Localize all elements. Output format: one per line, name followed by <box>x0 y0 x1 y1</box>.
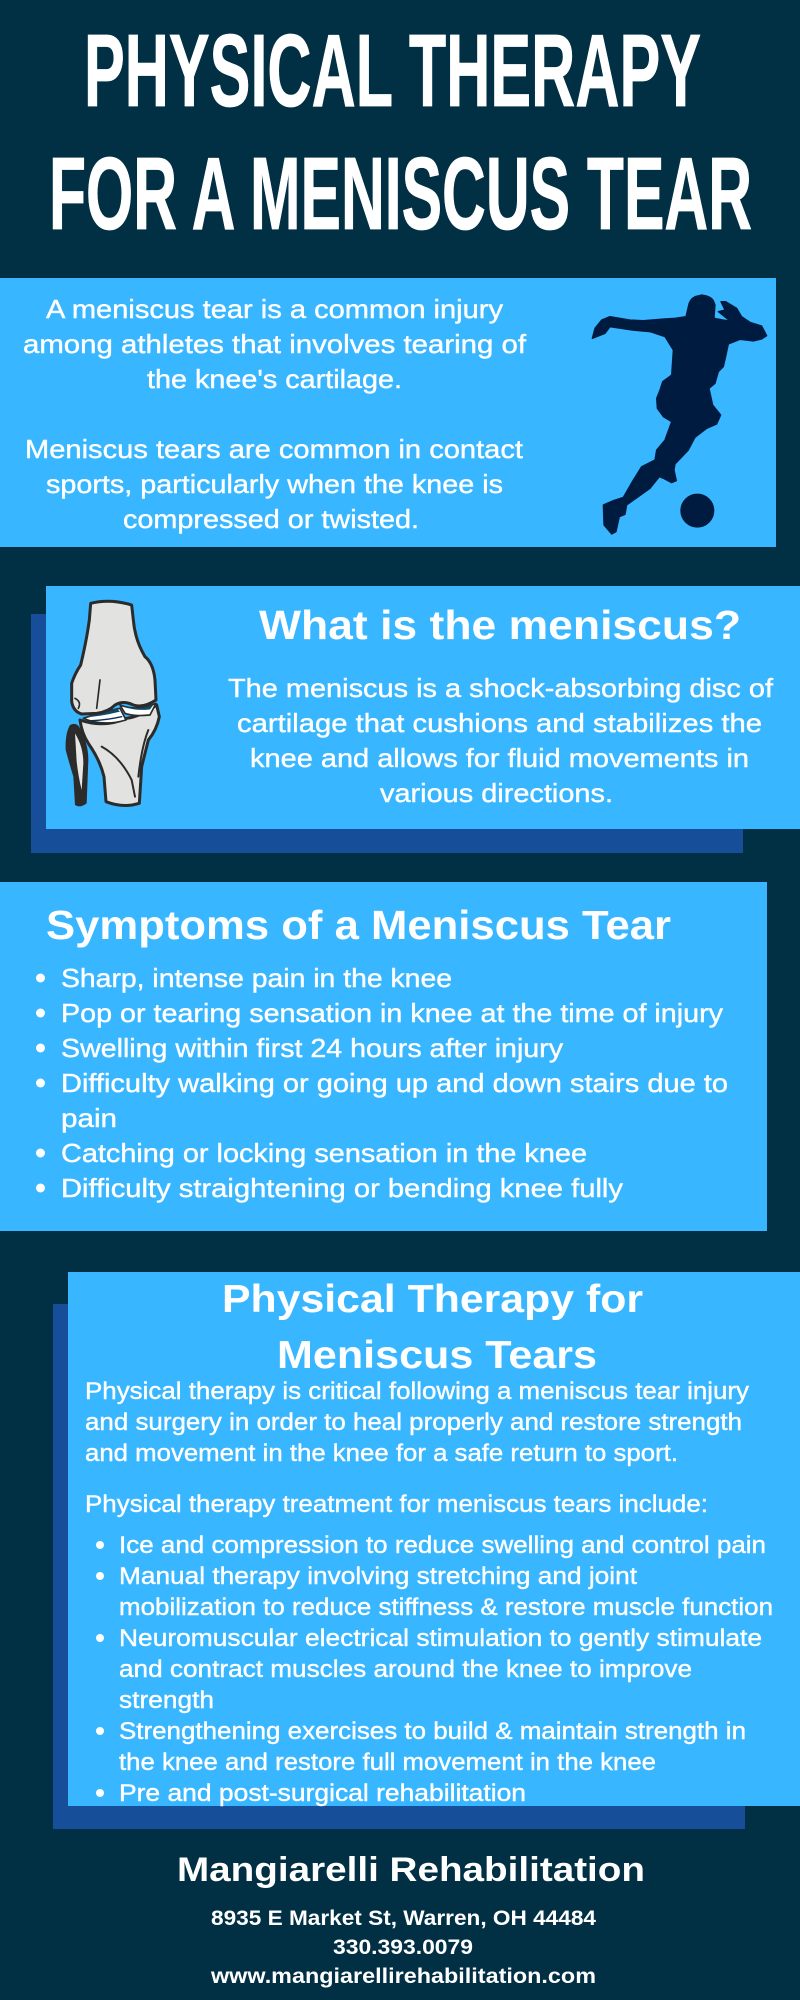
treatment list: mobilization to reduce stiffness & restore muscle function <box>119 1594 773 1621</box>
website: www.mangiarellirehabilitation.com <box>210 1965 596 1988</box>
panel: introduction <box>0 278 776 547</box>
meniscus description: cartilage that cushions and stabilizes the <box>237 708 762 738</box>
intro text: A meniscus tear is a common injury <box>46 294 503 324</box>
address: 8935 E Market St, Warren, OH 44484 <box>211 1907 596 1930</box>
intro text: Meniscus tears are common in contact <box>25 434 524 464</box>
panel: what is the meniscus <box>31 586 800 853</box>
heading: physical therapy for meniscus tears: Meniscus Tears <box>277 1334 597 1377</box>
intro text: the knee's cartilage. <box>147 364 402 394</box>
treatment list: strength <box>119 1687 214 1714</box>
symptoms list: Catching or locking sensation in the knee <box>61 1138 587 1168</box>
clinic name: Mangiarelli Rehabilitation <box>177 1851 645 1889</box>
panel: symptoms <box>0 882 767 1231</box>
therapy intro text: Physical therapy is critical following a meniscus tear injury <box>85 1378 749 1405</box>
intro text: sports, particularly when the knee is <box>46 469 503 499</box>
icon: knee joint <box>66 601 159 806</box>
footer: contact details <box>177 1851 645 1988</box>
intro text: compressed or twisted. <box>123 504 419 534</box>
symptoms list: Sharp, intense pain in the knee <box>61 963 452 993</box>
meniscus description: knee and allows for fluid movements in <box>250 743 749 773</box>
symptoms list: pain <box>61 1103 117 1133</box>
therapy intro text: Physical therapy treatment for meniscus tears include: <box>85 1491 708 1518</box>
symptoms list: Difficulty straightening or bending knee fully <box>61 1173 623 1203</box>
heading: physical therapy for meniscus tears <box>222 1278 643 1377</box>
treatment list: Neuromuscular electrical stimulation to gently stimulate <box>119 1625 762 1652</box>
treatment list: and contract muscles around the knee to improve <box>119 1656 692 1683</box>
heading: what is the meniscus: What is the meniscus? <box>259 602 741 648</box>
symptoms list: Pop or tearing sensation in knee at the time of injury <box>61 998 723 1028</box>
symptoms list: Swelling within first 24 hours after injury <box>61 1033 563 1063</box>
symptoms list: Difficulty walking or going up and down stairs due to <box>61 1068 728 1098</box>
intro text <box>23 294 527 534</box>
therapy intro text: and movement in the knee for a safe return to sport. <box>85 1440 678 1467</box>
therapy intro text: and surgery in order to heal properly and restore strength <box>85 1409 742 1436</box>
treatment list: Strengthening exercises to build & maintain strength in <box>119 1718 746 1745</box>
meniscus description: The meniscus is a shock-absorbing disc of <box>228 673 774 703</box>
heading: physical therapy for meniscus tears: Physical Therapy for <box>222 1278 643 1321</box>
icon: soccer player silhouette <box>592 295 767 534</box>
therapy intro text <box>85 1378 749 1518</box>
treatment list: Ice and compression to reduce swelling and control pain <box>119 1532 766 1559</box>
treatment list <box>96 1532 773 1807</box>
heading: symptoms: Symptoms of a Meniscus Tear <box>46 902 671 948</box>
treatment list: Pre and post-surgical rehabilitation <box>119 1780 526 1807</box>
treatment list: Manual therapy involving stretching and joint <box>119 1563 637 1590</box>
panel: physical therapy treatment <box>53 1272 800 1829</box>
phone: 330.393.0079 <box>333 1936 473 1959</box>
symptoms list <box>36 963 728 1203</box>
intro text: among athletes that involves tearing of <box>23 329 527 359</box>
title <box>49 13 752 251</box>
treatment list: the knee and restore full movement in the knee <box>119 1749 656 1776</box>
meniscus description <box>228 673 774 808</box>
meniscus description: various directions. <box>380 778 613 808</box>
